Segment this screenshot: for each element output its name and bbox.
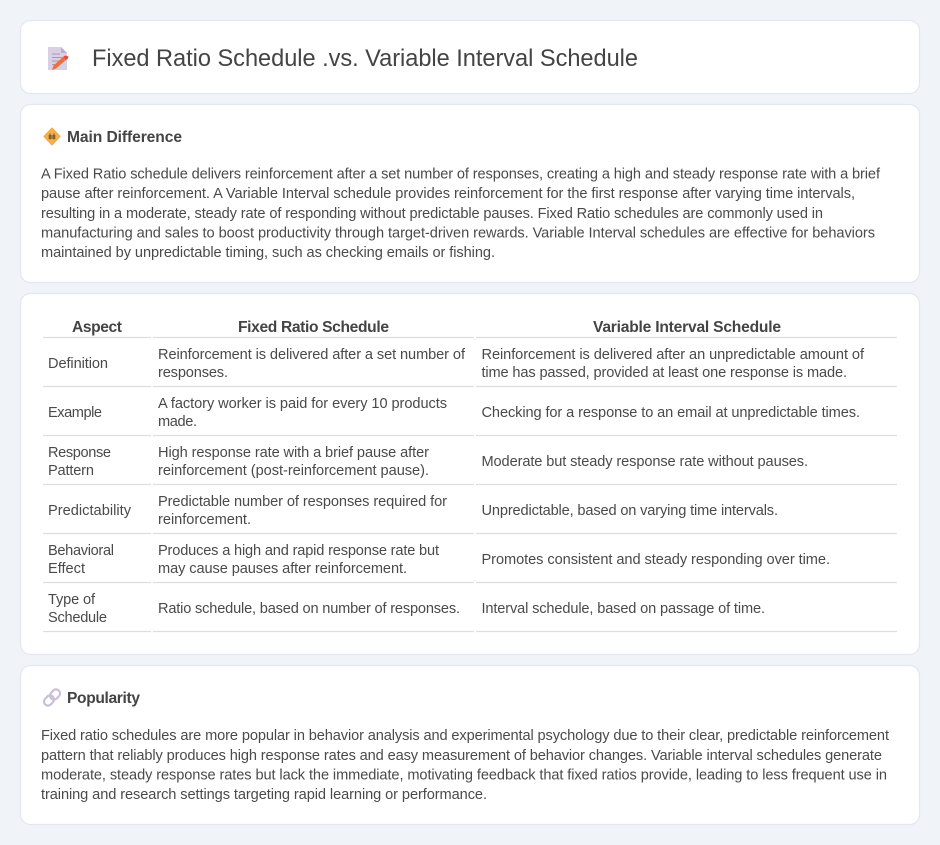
table header row: Fixed Ratio Schedule: [238, 319, 389, 336]
heading: popularity: Popularity: [67, 690, 140, 707]
table row: behavioral effect: Promotes consistent and steady responding over time.: [482, 552, 830, 568]
text block: popularity paragraph: [41, 728, 889, 803]
table row: example: Example: [48, 405, 102, 421]
table row: example: made.: [158, 414, 197, 430]
table row: example: A factory worker is paid for every 10 products: [158, 396, 447, 412]
text block: main difference paragraph: pause after reinforcement. A Variable Interval schedule provides reinforcement for the first response after varying time intervals,: [41, 186, 855, 202]
table row: predictability: Predictability: [48, 503, 132, 519]
table row: behavioral effect: Produces a high and rapid response rate but: [158, 543, 439, 559]
table row: behavioral effect: Effect: [48, 561, 85, 577]
table row: response pattern: Moderate but steady response rate without pauses.: [482, 454, 808, 470]
icon: link: [42, 688, 62, 707]
table row: definition: [43, 347, 897, 386]
table row: predictability: Predictable number of responses required for: [158, 494, 447, 510]
text block: popularity paragraph: pattern that reliably produces high response rates and easy measurement of behavior changes. Variable interval schedules generate: [41, 748, 882, 764]
table row: definition: time has passed, provided at least one response is made.: [482, 365, 847, 381]
text block: popularity paragraph: training and research settings targeting rapid learning or performance.: [41, 787, 487, 803]
table row: type of schedule: Ratio schedule, based on number of responses.: [158, 601, 460, 617]
icon: warning diamond: [44, 128, 60, 145]
table row: type of schedule: Schedule: [48, 610, 107, 626]
table row: response pattern: reinforcement (post-reinforcement pause).: [158, 463, 429, 479]
table row: predictability: [43, 494, 897, 534]
table row: behavioral effect: Behavioral: [48, 543, 114, 559]
table row: definition: Reinforcement is delivered after a set number of: [158, 347, 466, 363]
text block: main difference paragraph: [41, 167, 881, 261]
table row: type of schedule: [43, 592, 897, 632]
table row: behavioral effect: [43, 543, 897, 582]
text block: main difference paragraph: A Fixed Ratio schedule delivers reinforcement after a set number of responses, creating a high and steady response rate with a brief: [41, 167, 881, 183]
table header row: Variable Interval Schedule: [593, 319, 781, 336]
table row: response pattern: Pattern: [48, 463, 94, 479]
text block: popularity paragraph: Fixed ratio schedules are more popular in behavior analysis and experimental psychology due to their clear, predictable reinforcement: [41, 728, 889, 744]
table row: response pattern: High response rate with a brief pause after: [158, 445, 429, 461]
table row: response pattern: [43, 445, 897, 484]
text block: main difference paragraph: resulting in a moderate, steady rate of responding without predictable pauses. Fixed Ratio schedules are commonly used in: [41, 206, 823, 222]
panel: comparison table: [20, 294, 920, 654]
table header row: [43, 319, 897, 338]
table row: definition: responses.: [158, 365, 228, 381]
heading: main difference: Main Difference: [67, 129, 182, 146]
table header row: Aspect: [72, 319, 122, 336]
table row: behavioral effect: may cause pauses after reinforcement.: [158, 561, 407, 577]
table row: predictability: Unpredictable, based on varying time intervals.: [482, 503, 778, 519]
text block: main difference paragraph: manufacturing and sales to boost productivity through target-driven rewards. Variable Interval schedules are effective for behaviors: [41, 225, 875, 241]
table row: definition: Reinforcement is delivered after an unpredictable amount of: [482, 347, 865, 363]
text block: popularity paragraph: moderate, steady response rates but lack the immediate, motivating feedback that fixed ratios provide, leading to less frequent use in: [41, 768, 887, 784]
icon: document with pencil: [48, 47, 68, 70]
table row: predictability: reinforcement.: [158, 512, 251, 528]
table row: type of schedule: Interval schedule, based on passage of time.: [482, 601, 765, 617]
text block: main difference paragraph: maintained by unpredictable timing, such as checking emails or fishing.: [41, 245, 495, 261]
title: Fixed Ratio Schedule .vs. Variable Interval Schedule: [92, 46, 638, 72]
panel: main difference: [20, 104, 920, 282]
table row: type of schedule: Type of: [48, 592, 96, 608]
panel: popularity: [20, 666, 920, 824]
table row: example: Checking for a response to an email at unpredictable times.: [482, 405, 860, 421]
table row: response pattern: Response: [48, 445, 111, 461]
table row: example: [43, 396, 897, 436]
panel: header: [20, 20, 920, 94]
table row: definition: Definition: [48, 356, 108, 372]
